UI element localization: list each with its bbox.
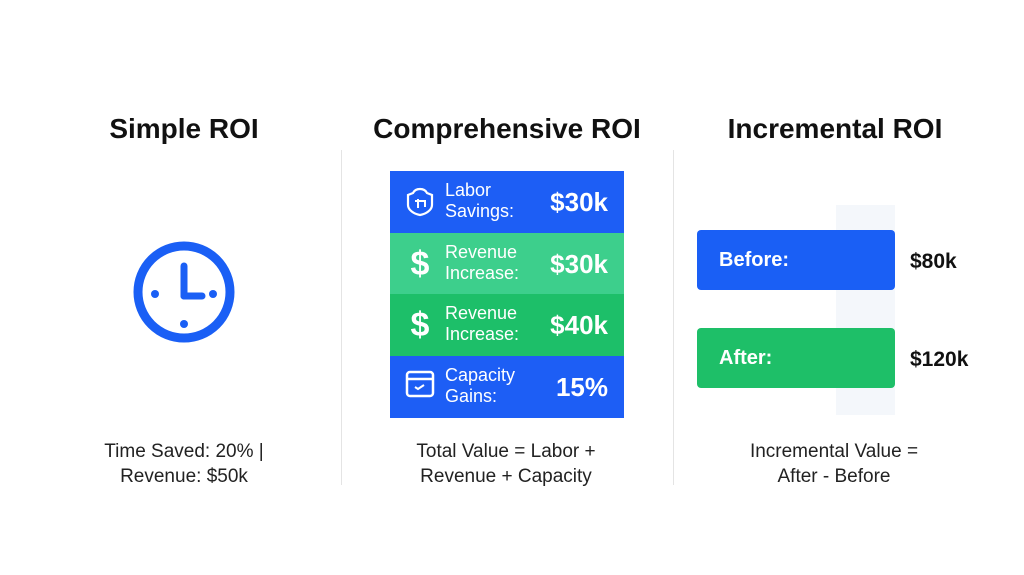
row: labor savings: Savings: <box>445 201 514 221</box>
row: capacity gains <box>390 356 624 418</box>
row: revenue increase 1: $30k <box>550 249 608 279</box>
bar: before: Before: <box>719 249 789 271</box>
row: revenue increase 1: $ <box>411 245 429 283</box>
caption: simple ROI: Time Saved: 20% | <box>104 441 264 462</box>
row: capacity gains: Gains: <box>445 386 497 406</box>
title: simple ROI: Simple ROI <box>109 113 259 144</box>
bar: before <box>697 230 895 290</box>
row: labor savings <box>390 171 624 233</box>
icon: clock <box>134 242 234 342</box>
row: revenue increase 1 <box>390 233 624 295</box>
row: revenue increase 2: $40k <box>550 310 608 340</box>
row: revenue increase 1: Revenue <box>445 242 517 262</box>
row: revenue increase 1: Increase: <box>445 263 519 283</box>
caption: simple ROI <box>104 441 264 487</box>
caption: comprehensive ROI: Total Value = Labor + <box>416 441 596 462</box>
row: capacity gains: 15% <box>556 372 608 402</box>
bar: after <box>697 328 895 388</box>
row: capacity gains: Capacity <box>445 365 515 385</box>
value: after: $120k <box>910 348 968 371</box>
caption: incremental ROI <box>750 441 918 487</box>
row: revenue increase 2: Revenue <box>445 303 517 323</box>
caption: incremental ROI: Incremental Value = <box>750 441 918 462</box>
bar: after: After: <box>719 347 772 369</box>
caption: simple ROI: Revenue: $50k <box>120 466 248 487</box>
caption: incremental ROI: After - Before <box>778 466 890 487</box>
caption: comprehensive ROI: Revenue + Capacity <box>420 466 592 487</box>
table: comprehensive ROI <box>390 171 624 418</box>
title: comprehensive ROI: Comprehensive ROI <box>373 113 641 144</box>
row: labor savings: Labor <box>445 180 491 200</box>
caption: comprehensive ROI <box>416 441 596 487</box>
row: revenue increase 2 <box>390 294 624 356</box>
row: revenue increase 2: Increase: <box>445 324 519 344</box>
title: incremental ROI: Incremental ROI <box>728 113 942 144</box>
value: before: $80k <box>910 250 957 273</box>
row: labor savings: $30k <box>550 187 608 217</box>
row: revenue increase 2: $ <box>411 306 429 344</box>
